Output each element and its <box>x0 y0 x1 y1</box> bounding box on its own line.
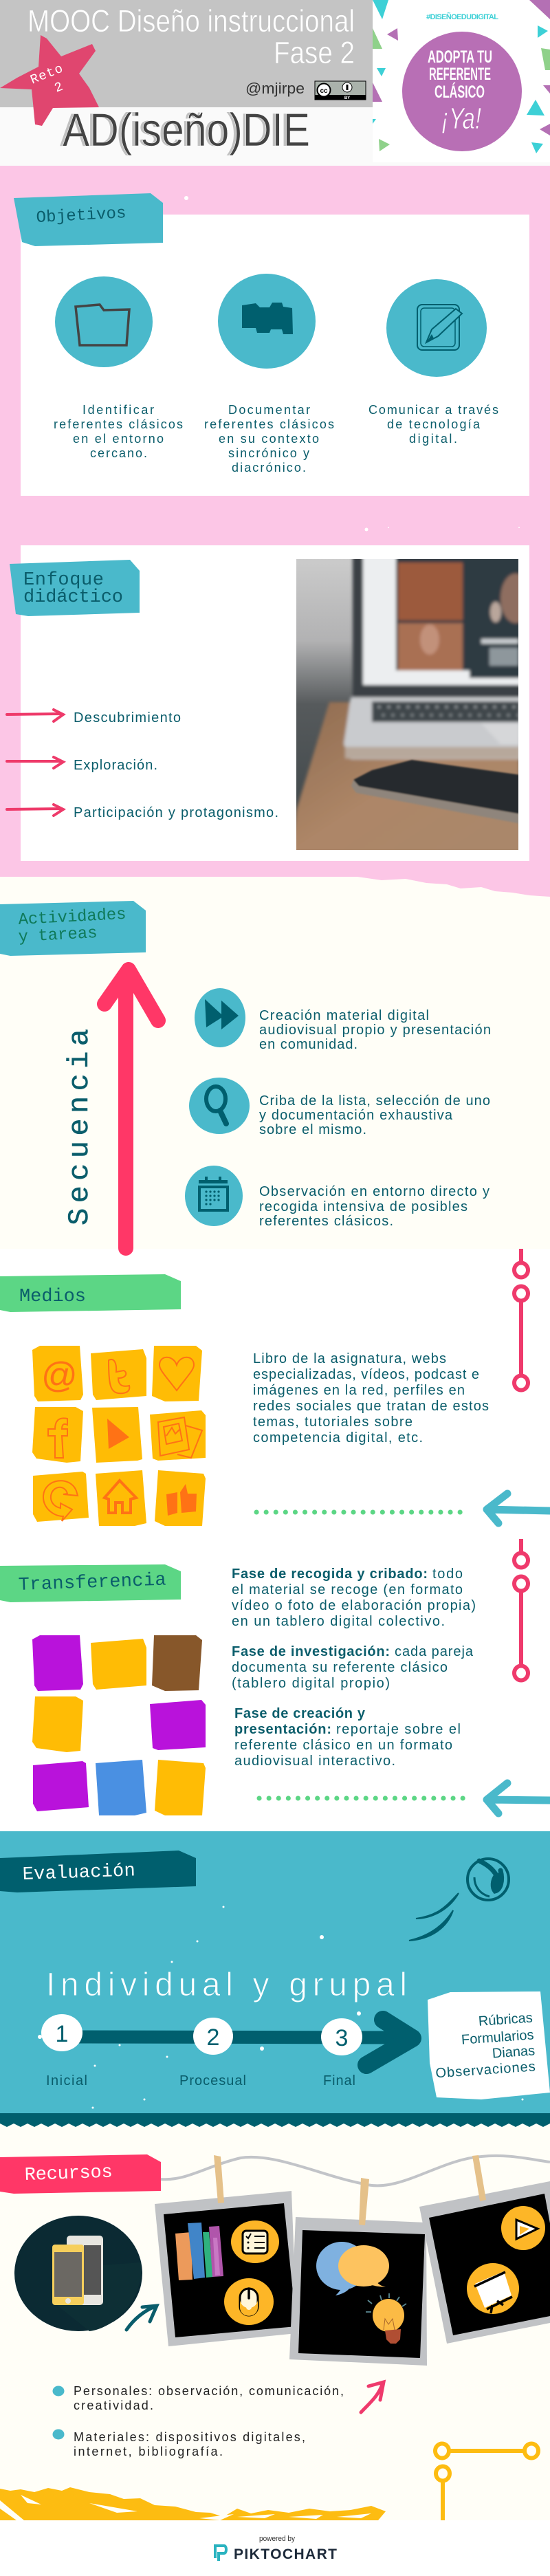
text: fase de creación: reportaje sobre el <box>336 1722 461 1737</box>
poster: adopta tu referente clásico: REFERENTE <box>429 65 491 84</box>
connector: pink rings transferencia <box>514 1539 528 1681</box>
footer: powered by piktochart <box>215 2535 337 2562</box>
list: personales: creatividad. <box>74 2399 153 2412</box>
poster: adopta tu referente clásico: #DISEÑOEDUDIGITAL <box>426 12 498 21</box>
text: fase de recogida <box>232 1567 476 1629</box>
photo: laptop and phone on desk <box>292 554 531 853</box>
polaroid: books and tools <box>155 2191 297 2346</box>
text: fase de creación: Fase de creación y <box>234 1706 366 1721</box>
poster: adopta tu referente clásico: ADOPTA TU <box>428 47 492 67</box>
step: creación: en comunidad. <box>259 1037 358 1052</box>
heading: AD(iseño)DIE: AD(iseño)DIE <box>63 104 310 156</box>
list: exploración: Exploración. <box>74 758 157 773</box>
text: fase de recogida: todo <box>432 1567 463 1582</box>
step: criba: sobre el mismo. <box>259 1122 366 1137</box>
list: participación: Participación y protagonismo. <box>74 805 278 820</box>
step 3: final: Final <box>323 2073 355 2088</box>
list: exploración <box>7 757 157 773</box>
text: fase de investigación: cada pareja <box>395 1644 474 1659</box>
text: fase de investigación: Fase de investigación: <box>232 1644 390 1659</box>
panel: actividades y tareas <box>0 901 491 1248</box>
icon: flying globe <box>409 1859 509 1941</box>
tag: enfoque didáctico <box>10 560 140 616</box>
heading: individual y grupal: Individual y grupal <box>46 1967 407 2003</box>
text: fase de creación: audiovisual interactivo. <box>234 1754 395 1769</box>
icon grid: orange social media tiles <box>32 1346 206 1526</box>
tag: recursos: Recursos <box>24 2163 113 2186</box>
objective: archive <box>204 274 334 474</box>
footer: powered by piktochart: PIKTOCHART <box>234 2546 337 2562</box>
tag: actividades y tareas: Actividades <box>18 906 126 930</box>
tag: objetivos: Objetivos <box>36 204 126 228</box>
panel: enfoque didáctico <box>7 545 531 861</box>
step: observación: referentes clásicos. <box>259 1214 393 1229</box>
star: Reto 2: Reto <box>28 61 65 88</box>
header panel <box>0 0 373 126</box>
connector: pink rings medios <box>514 1249 528 1390</box>
tag: enfoque didáctico: didáctico <box>23 587 123 608</box>
text: medios description <box>253 1351 489 1445</box>
objective: folder: referentes clásicos <box>54 417 183 431</box>
tag: medios: Medios <box>19 1287 86 1307</box>
text: fase de creación <box>234 1706 461 1769</box>
objective: archive: sincrónico y <box>228 446 309 460</box>
step: observación: recogida intensiva de posibles <box>259 1199 468 1214</box>
text: fase de recogida: vídeo o foto de elaboración propia) <box>232 1598 476 1613</box>
illustration: phones in circle <box>14 2216 142 2331</box>
step 2: procesual <box>179 2018 246 2088</box>
tag: evaluación <box>0 1851 196 1892</box>
title: MOOC Diseño instruccional Fase 2: MOOC Diseño instruccional <box>28 3 355 39</box>
list: materiales: Materiales: dispositivos digitales, <box>74 2430 305 2444</box>
list: personales: Personales: observación, comunicación, <box>74 2384 344 2398</box>
step: observación <box>185 1166 490 1229</box>
panel: transferencia <box>0 1539 550 1815</box>
text: medios description: redes sociales que tratan de estos <box>253 1399 489 1414</box>
tag: transferencia: Transferencia <box>18 1571 166 1596</box>
tag: enfoque didáctico: Enfoque <box>23 570 104 591</box>
star: Reto 2 <box>0 35 99 126</box>
tag: actividades y tareas <box>0 901 146 956</box>
text: medios description: Libro de la asignatura, webs <box>253 1351 446 1366</box>
note: instruments: Rúbricas <box>478 2010 533 2029</box>
list: descubrimiento <box>7 710 181 725</box>
step: criba <box>189 1078 490 1137</box>
step 1: inicial: Inicial <box>46 2073 87 2088</box>
text: fase de investigación: (tablero digital propio) <box>232 1676 390 1691</box>
step: creación <box>195 988 491 1052</box>
step 1: inicial: 1 <box>56 2021 68 2047</box>
text: fase de investigación <box>232 1644 474 1691</box>
tag: actividades y tareas: y tareas <box>18 924 98 947</box>
title: MOOC Diseño instruccional Fase 2 <box>28 3 355 70</box>
list: personales <box>52 2384 344 2412</box>
tag: transferencia <box>0 1564 181 1602</box>
panel: objetivos <box>14 193 529 496</box>
list: materiales <box>52 2429 305 2458</box>
objective: digital edit: Comunicar a través <box>368 403 498 417</box>
objective: folder: Identificar <box>82 403 154 417</box>
badge: creative commons BY: cc <box>320 87 328 95</box>
arrow: pink <box>361 2382 384 2412</box>
panel: evaluación <box>0 1851 550 2099</box>
objective: digital edit: digital. <box>409 432 457 446</box>
step 3: final <box>321 2018 362 2088</box>
text: fase de investigación: documenta su referente clásico <box>232 1660 448 1675</box>
clothespins <box>214 2155 486 2225</box>
footer: powered by piktochart: powered by <box>259 2535 295 2543</box>
dotted line with arrow: medios <box>256 1494 550 1523</box>
list: descubrimiento: Descubrimiento <box>74 710 181 725</box>
rope <box>161 2156 550 2185</box>
icon grid: orange social media tiles: @ <box>41 1355 78 1395</box>
step 3: final: 3 <box>336 2025 348 2051</box>
tag: medios <box>0 1274 181 1312</box>
objective: archive: referentes clásicos <box>204 417 334 431</box>
panel: medios <box>0 1249 550 1526</box>
note: instruments: Observaciones <box>435 2059 536 2081</box>
badge: creative commons BY: BY <box>344 96 350 100</box>
objective: archive: diacrónico. <box>232 461 306 474</box>
note: instruments: Dianas <box>492 2043 536 2062</box>
arrow: sequence <box>104 970 158 1248</box>
arrow: teal <box>126 2306 157 2330</box>
note: instruments: Formularios <box>461 2027 534 2048</box>
step 2: procesual: Procesual <box>179 2073 246 2088</box>
title: MOOC Diseño instruccional Fase 2: Fase 2 <box>274 35 355 70</box>
dotted line with arrow: transferencia <box>259 1783 550 1813</box>
connector: yellow rings <box>435 2444 538 2520</box>
polaroid: speech and idea <box>289 2217 427 2366</box>
objective: archive: en su contexto <box>219 432 319 446</box>
text: medios description: temas, tutoriales sobre <box>253 1415 412 1430</box>
badge: creative commons BY <box>315 81 366 100</box>
step: observación: Observación en entorno directo y <box>259 1184 490 1199</box>
list: materiales: internet, bibliografía. <box>74 2445 223 2458</box>
poster: adopta tu referente clásico <box>373 0 550 162</box>
objective: folder <box>54 276 183 460</box>
objective: archive: Documentar <box>228 403 310 417</box>
text: medios description: imágenes en la red, perfiles en <box>253 1383 465 1398</box>
step 2: procesual: 2 <box>207 2024 219 2051</box>
tag: evaluación: Evaluación <box>22 1861 135 1886</box>
step 1: inicial <box>41 2014 87 2088</box>
tag: objetivos <box>14 193 163 246</box>
note: instruments <box>428 1991 550 2099</box>
objective: digital edit: de tecnología <box>387 417 481 431</box>
text: medios description: competencia digital, etc. <box>253 1430 423 1445</box>
step: creación: audiovisual propio y presentación <box>259 1023 491 1038</box>
objective: digital edit <box>368 279 498 446</box>
text: fase de recogida: Fase de recogida y cribado: <box>232 1567 428 1582</box>
objective: folder: en el entorno <box>73 432 164 446</box>
text: fase de recogida: en un tablero digital colectivo. <box>232 1614 445 1629</box>
colour tiles <box>32 1635 206 1815</box>
text: fase de creación: referente clásico en un formato <box>234 1738 452 1753</box>
text: medios description: especializadas, vídeos, podcast e <box>253 1367 479 1382</box>
objective: folder: cercano. <box>90 446 147 460</box>
poster: adopta tu referente clásico: ¡Ya! <box>441 102 481 135</box>
tag: recursos <box>0 2154 161 2194</box>
logo mark <box>215 2546 226 2561</box>
text: fase de recogida: el material se recoge (en formato <box>232 1582 463 1597</box>
poster: adopta tu referente clásico: CLÁSICO <box>434 82 485 102</box>
author handle: @mjirpe <box>245 80 305 97</box>
step: creación: Creación material digital <box>259 1008 429 1023</box>
step: criba: y documentación exhaustiva <box>259 1108 453 1123</box>
vertical label: secuencia: Secuencia <box>63 1029 96 1225</box>
step: criba: Criba de la lista, selección de uno <box>259 1093 490 1109</box>
heading: AD(iseño)DIE: AD(iseño)DIE <box>60 104 307 156</box>
timeline arrow <box>79 2020 412 2065</box>
brush stroke: yellow <box>0 2487 386 2520</box>
panel: recursos <box>0 2154 550 2520</box>
star: Reto 2: 2 <box>52 79 65 96</box>
polaroid: media and presentation <box>419 2181 550 2344</box>
text: fase de creación: presentación: <box>234 1722 331 1737</box>
